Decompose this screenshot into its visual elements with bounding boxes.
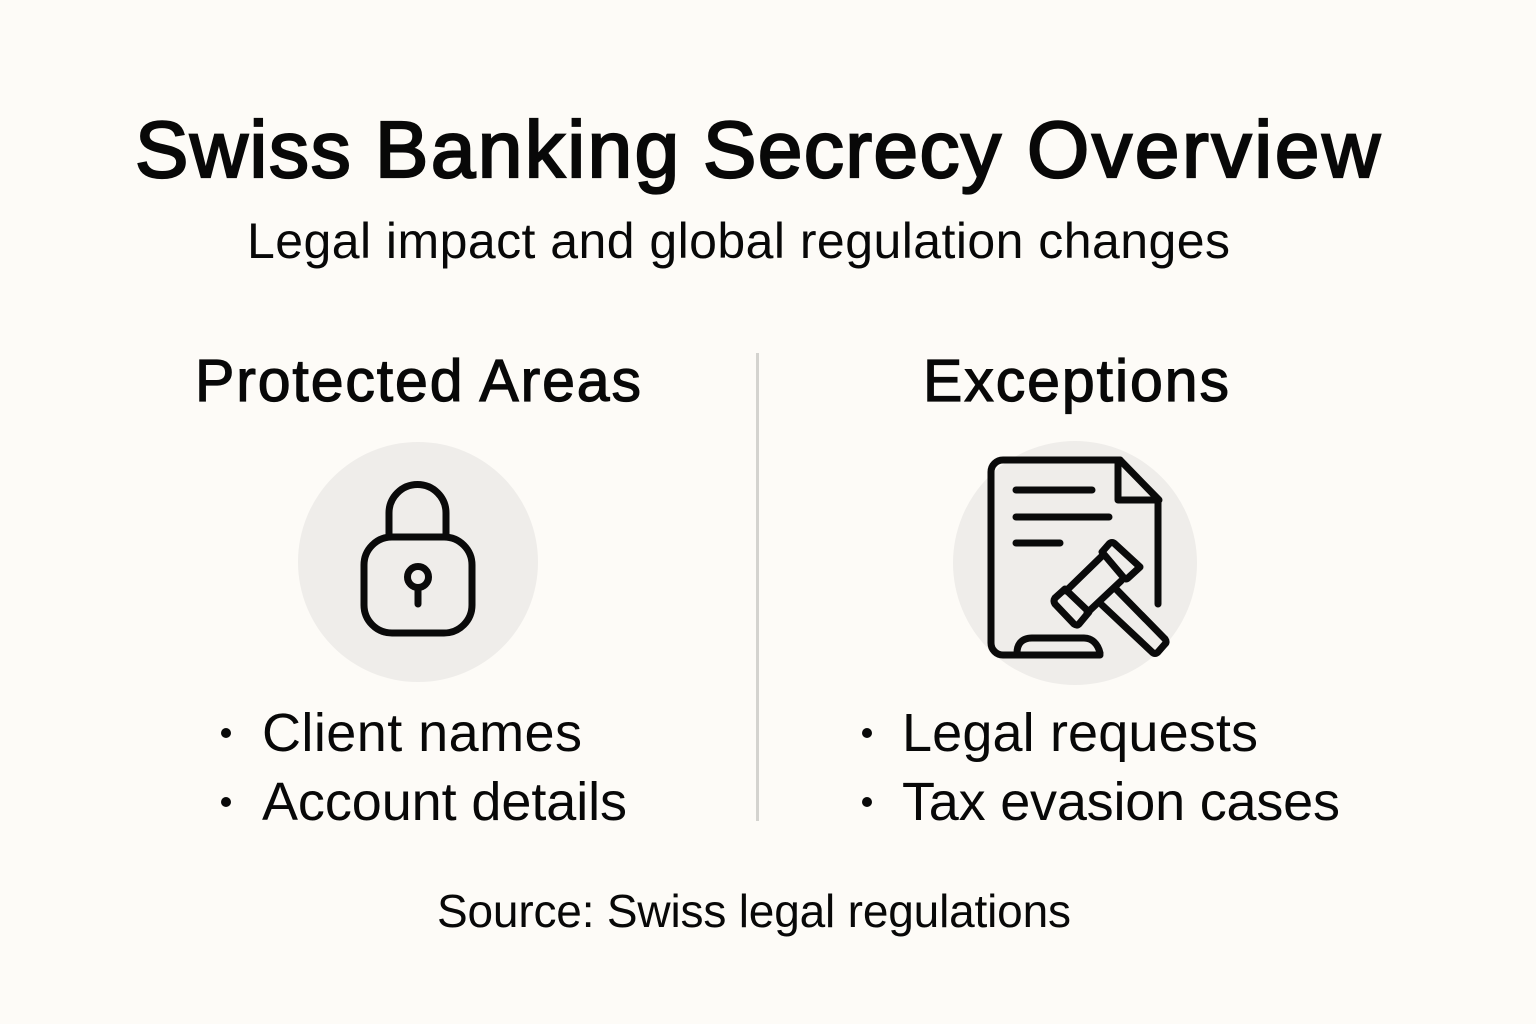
source note: Source: Swiss legal regulations [437,885,1071,937]
icon: legal document with gavel [953,441,1197,685]
list: protected items: Client names [262,703,582,763]
panel: exceptions [862,348,1340,832]
list: protected items [221,703,627,832]
title: Swiss [135,105,352,194]
list: protected items: Account details [262,772,627,832]
title: Banking [375,105,682,194]
list: exception items [862,703,1340,832]
list: exception items: Tax evasion cases [902,772,1340,832]
icon: padlock [298,442,538,682]
list: exception items: Legal requests [902,703,1258,763]
title: Secrecy [703,105,1002,194]
panel: protected areas [195,348,641,832]
heading: exceptions: Exceptions [923,348,1229,414]
heading: protected areas: Protected Areas [195,348,641,414]
subtitle: Legal impact and global regulation changes [247,213,1230,269]
title: Overview [1027,105,1383,194]
center divider [756,353,759,821]
